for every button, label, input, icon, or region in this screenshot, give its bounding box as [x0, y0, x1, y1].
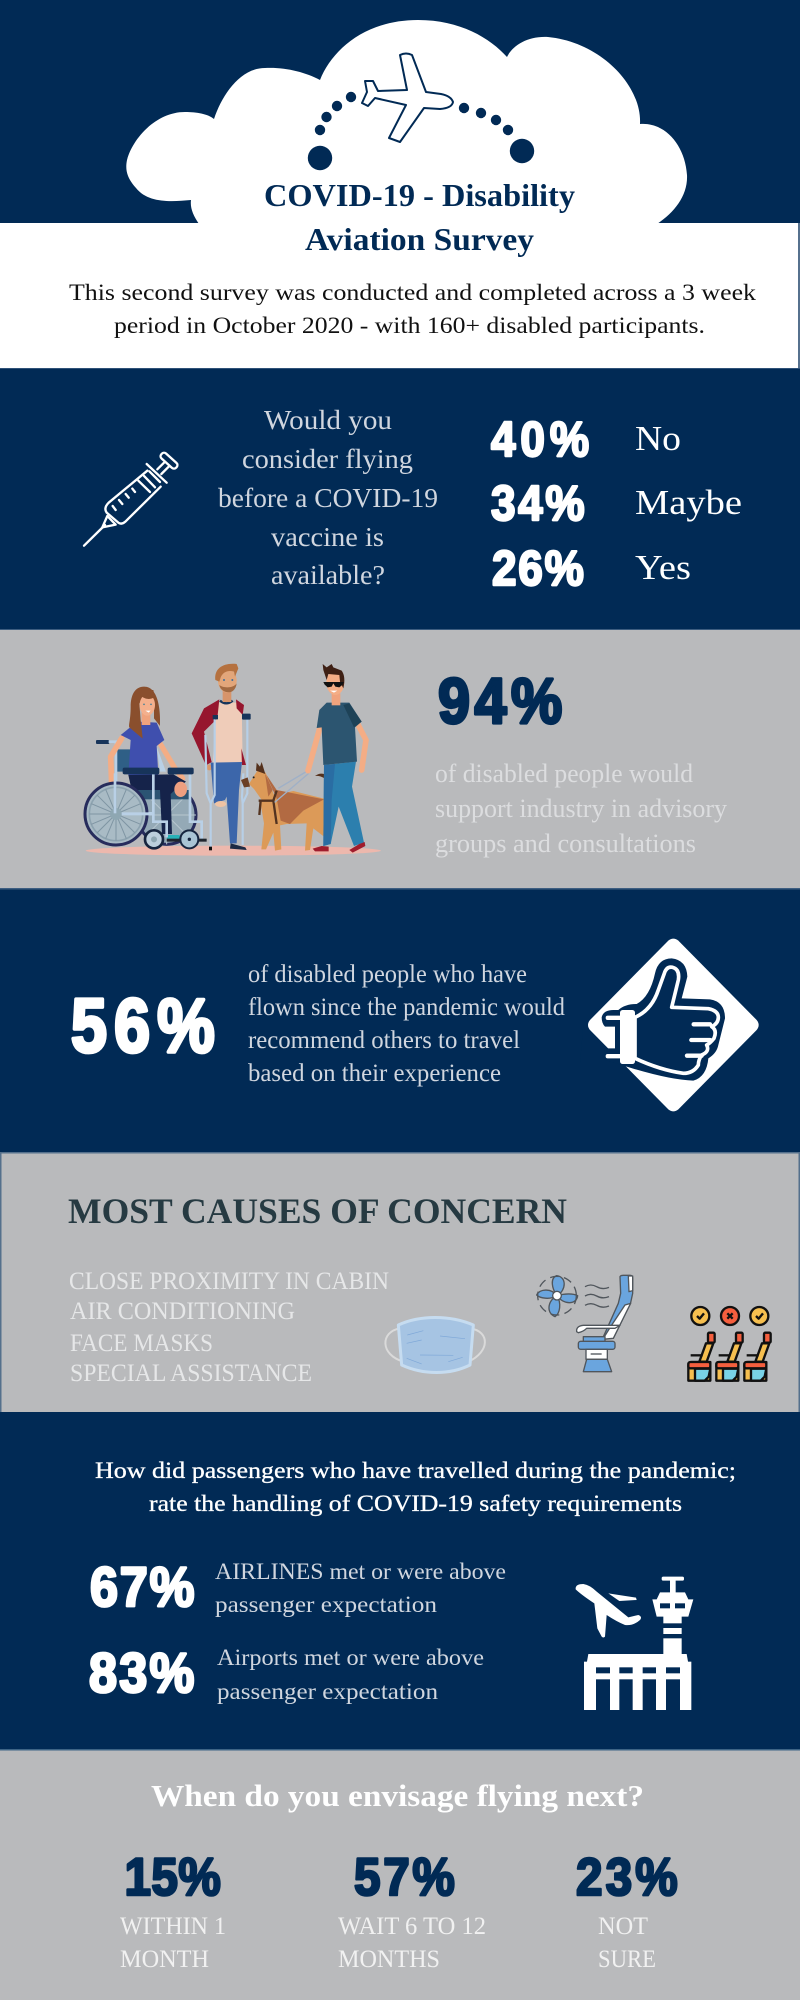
- title: COVID-19 - Disability: [264, 177, 575, 213]
- wheelchair and woman: [85, 687, 207, 848]
- title: [264, 177, 575, 257]
- list of concerns: AIR CONDITIONING: [70, 1298, 295, 1325]
- stat: 67% airlines: [90, 1557, 506, 1619]
- stat: 34% maybe: Maybe: [635, 483, 742, 522]
- panel: header with cloud and title: [0, 0, 800, 370]
- stat: 57% wait 6 to 12 months: WAIT 6 TO 12: [338, 1913, 486, 1940]
- heading: When do you envisage flying next?: [151, 1778, 644, 1813]
- question text: [218, 405, 438, 590]
- icon: airport terminal and plane: [576, 1577, 693, 1710]
- text: support industry: [435, 759, 727, 858]
- text: recommend others: of disabled people who have: [248, 961, 527, 988]
- text: recommend others: based on their experience: [248, 1060, 501, 1087]
- icon: face mask: [385, 1317, 485, 1372]
- stat: 57% wait 6 to 12 months: [338, 1847, 486, 1973]
- text: support industry: support industry in advisory: [435, 794, 727, 823]
- stat: 83% airports: Airports met or were above: [217, 1645, 484, 1671]
- stat: 40% no: [491, 412, 681, 467]
- intro text: [69, 280, 757, 338]
- heading: MOST CAUSES OF CONCERN: [68, 1191, 567, 1231]
- question heading: [95, 1458, 736, 1516]
- stat: 67% airlines: 67%: [90, 1557, 194, 1619]
- text: support industry: groups and consultations: [435, 829, 696, 858]
- list of concerns: FACE MASKS: [70, 1330, 213, 1357]
- stat: 23% not sure: SURE: [598, 1946, 656, 1973]
- panel: vaccine question: [0, 369, 800, 630]
- stat: 23% not sure: NOT: [598, 1913, 648, 1940]
- intro text: This second survey was conducted and completed across a 3 week: [69, 280, 757, 305]
- icon: three passenger seats with ticks and cross: [688, 1307, 771, 1381]
- stat: 26% yes: [492, 541, 691, 596]
- icon: plane with dotted flight path: [308, 54, 534, 170]
- stat: 15% within 1 month: WITHIN 1: [120, 1913, 226, 1940]
- man with crutches: [192, 664, 251, 850]
- question text: before a COVID-19: [218, 483, 438, 513]
- stat: 26% yes: Yes: [635, 548, 691, 587]
- icon: syringe: [84, 451, 179, 546]
- title: Aviation Survey: [305, 221, 534, 257]
- question text: available?: [271, 560, 385, 590]
- stat: 57% wait 6 to 12 months: MONTHS: [338, 1946, 440, 1973]
- list of concerns: [69, 1268, 389, 1387]
- panel: most causes of concern: [0, 1152, 800, 1412]
- question heading: rate the handling of COVID-19 safety requirements: [149, 1491, 682, 1516]
- stat: 40% no: 40%: [491, 412, 589, 467]
- text: recommend others: [248, 961, 565, 1087]
- intro text: period in October 2020 - with 160+ disabled participants.: [114, 313, 705, 338]
- stat: 34% maybe: [491, 476, 742, 531]
- stat: 83% airports: [89, 1643, 484, 1705]
- icon: air conditioning fan and plane seat: [537, 1275, 633, 1372]
- list of concerns: CLOSE PROXIMITY IN CABIN: [69, 1268, 389, 1295]
- panel: 56% recommend: [0, 890, 800, 1152]
- stat: 40% no: No: [635, 419, 681, 458]
- stat: 67% airlines: passenger expectation: [215, 1592, 437, 1618]
- text: support industry: of disabled people would: [435, 759, 693, 788]
- guide dog: [241, 762, 324, 851]
- stat: 57% wait 6 to 12 months: 57%: [354, 1847, 455, 1907]
- stat: 34% maybe: 34%: [491, 476, 585, 531]
- stat: 23% not sure: 23%: [576, 1847, 678, 1907]
- stat: 15% within 1 month: [120, 1847, 226, 1973]
- question text: Would you: [264, 405, 393, 435]
- man with sunglasses: [308, 664, 366, 853]
- icon: thumbs up in diamond: [580, 939, 759, 1111]
- stat: 67% airlines: AIRLINES met or were above: [215, 1559, 506, 1585]
- illustration: disabled people with wheelchair, crutches and guide dog: [85, 664, 381, 856]
- question text: vaccine is: [271, 522, 384, 552]
- text: recommend others: recommend others to travel: [248, 1027, 520, 1054]
- stat: 26% yes: 26%: [492, 541, 584, 596]
- stat: 23% not sure: [576, 1847, 678, 1973]
- panel: when flying next: [0, 1750, 800, 2000]
- panel: safety requirements rating: [0, 1412, 800, 1750]
- stat: 56%: 56%: [71, 983, 215, 1068]
- question heading: How did passengers who have travelled during the pandemic;: [95, 1458, 736, 1483]
- stat: 83% airports: passenger expectation: [217, 1679, 438, 1705]
- stat: 15% within 1 month: MONTH: [120, 1946, 209, 1973]
- panel: 94% advisory groups: [0, 630, 800, 890]
- stat: 83% airports: 83%: [89, 1643, 194, 1705]
- question text: consider flying: [242, 444, 413, 474]
- icon: cloud: [126, 20, 687, 224]
- list of concerns: SPECIAL ASSISTANCE: [70, 1360, 312, 1387]
- stat: 15% within 1 month: 15%: [124, 1847, 221, 1907]
- text: recommend others: flown since the pandemic would: [248, 994, 565, 1021]
- stat: 94%: 94%: [438, 665, 562, 737]
